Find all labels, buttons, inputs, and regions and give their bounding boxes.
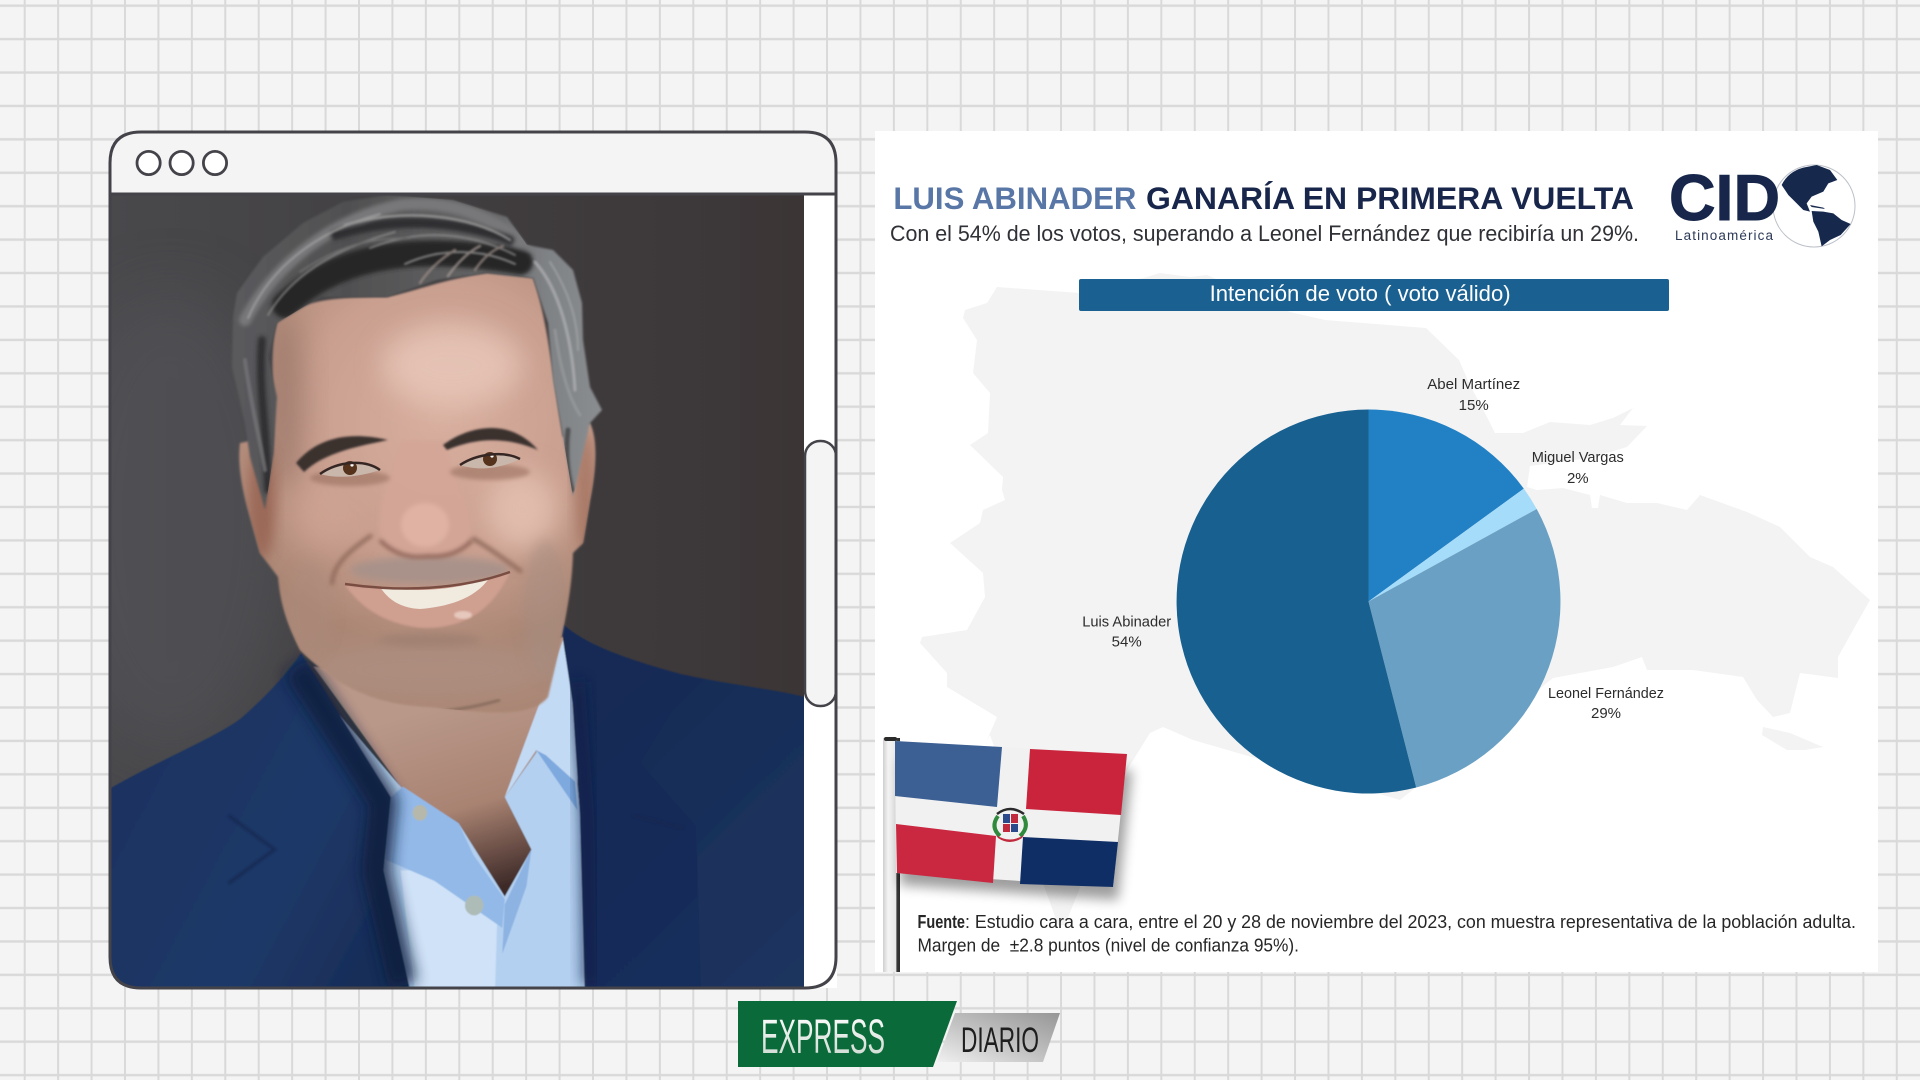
slice: Abel Martínez 15% — [1368, 410, 1524, 602]
label: Luis Abinader: Luis Abinader — [1082, 614, 1171, 630]
Diario wordmark: DIARIO — [961, 1021, 1039, 1060]
label: Abel Martínez: 15% — [1459, 397, 1489, 414]
logo: CID Latinoamérica — [1669, 161, 1855, 247]
flag coat of arms — [994, 809, 1026, 842]
slice: Luis Abinader 54% — [1177, 410, 1416, 794]
source note: Fuente — [918, 912, 965, 932]
label: Leonel Fernández — [1548, 685, 1664, 722]
face — [232, 195, 602, 713]
title — [893, 180, 1634, 216]
logo wordmark: CID — [1669, 161, 1780, 234]
label: Miguel Vargas — [1532, 449, 1624, 487]
window title bar — [110, 132, 836, 194]
eyes — [310, 452, 530, 486]
smile folds — [332, 535, 522, 585]
source note: Margen de ±2.8 puntos (nivel de confianza 95%). — [918, 936, 1299, 956]
logo tagline: Latinoamérica — [1675, 228, 1773, 243]
pie chart — [1082, 376, 1664, 794]
mouth — [345, 572, 510, 628]
hair — [232, 195, 602, 510]
map: Dominican Republic silhouette — [920, 273, 1870, 925]
title: LUIS ABINADER — [893, 180, 1137, 216]
chart heading banner — [1079, 279, 1669, 311]
eyebrows — [296, 428, 538, 472]
slice: Leonel Fernández 29% — [1368, 509, 1560, 788]
browser window with portrait photo — [50, 132, 837, 991]
flag cloth — [895, 741, 1127, 887]
source note — [918, 912, 1856, 956]
nose — [378, 502, 474, 560]
label: Leonel Fernández: Leonel Fernández — [1548, 685, 1664, 702]
pole cap — [884, 737, 897, 741]
label: Luis Abinader: 54% — [1112, 634, 1142, 650]
logo: Express Diario — [738, 1001, 1060, 1067]
subtitle: Con el 54% de los votos, superando a Leonel Fernández que recibiría un 29%. — [890, 221, 1639, 246]
scrollbar thumb — [805, 441, 836, 706]
flag pole — [883, 738, 900, 972]
title: GANARÍA EN PRIMERA VUELTA — [1146, 180, 1634, 216]
label: Luis Abinader — [1082, 614, 1171, 650]
label: Miguel Vargas: 2% — [1567, 470, 1589, 487]
flag shadow — [900, 760, 1132, 900]
label: Leonel Fernández: 29% — [1591, 705, 1621, 722]
window control dots — [137, 151, 227, 175]
label: Abel Martínez — [1427, 376, 1520, 414]
label: Abel Martínez: Abel Martínez — [1427, 376, 1520, 393]
panel: survey results — [875, 131, 1878, 972]
Diario plate — [937, 1013, 1060, 1062]
icon: globe — [1773, 165, 1855, 247]
icon: Dominican Republic flag — [883, 737, 1132, 972]
portrait photo: Luis Abinader — [50, 195, 808, 991]
source note: : Estudio cara a cara, entre el 20 y 28 de noviembre del 2023, con muestra representativa de la población adulta. — [965, 912, 1856, 932]
slice: Miguel Vargas 2% — [1368, 489, 1537, 602]
label: Miguel Vargas: Miguel Vargas — [1532, 449, 1624, 466]
Express wordmark: EXPRESS — [761, 1011, 885, 1064]
chart heading banner: Intención de voto ( voto válido) — [1210, 281, 1511, 306]
window outline — [110, 132, 836, 988]
scrollbar track — [804, 195, 837, 988]
Express plate — [738, 1001, 957, 1067]
